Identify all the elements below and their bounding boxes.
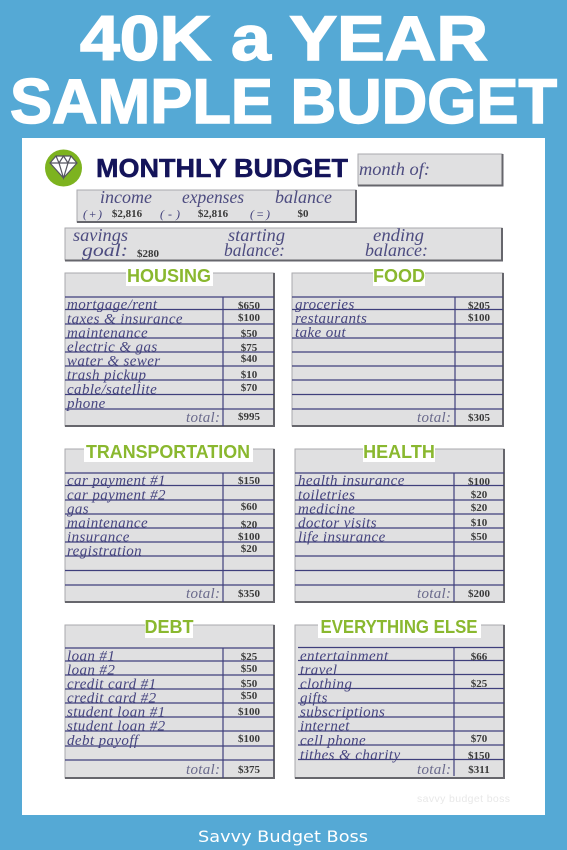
panel: health: medicine [298,502,355,518]
panel: debt: student loan #1 [67,704,166,720]
panel: health: total: [417,586,451,602]
panel: income expenses balance: balance [275,187,332,207]
heading: monthly budget: MONTHLY BUDGET [96,153,348,183]
heading: transportation: TRANSPORTATION [86,442,250,462]
title: 40K a YEAR [80,4,488,74]
panel: transportation: $100 [238,531,260,543]
panel: savings goal and balances [65,225,502,260]
panel: transportation: car payment #2 [67,488,166,504]
panel: debt: total: [186,762,220,778]
panel: food: total: [417,410,451,426]
panel: food: restaurants [295,311,367,327]
panel: food: groceries [295,297,355,313]
heading: housing: HOUSING [127,266,211,286]
panel: white budget sheet [22,138,545,815]
panel: income expenses balance [77,187,356,222]
panel: everything else: subscriptions [300,704,385,720]
panel: housing: mortgage/rent [67,297,158,313]
panel: debt: $25 [241,651,258,663]
heading: health: HEALTH [363,442,435,462]
panel: savings goal and balances: savings [73,225,128,245]
panel: debt [65,617,274,778]
panel: income expenses balance: $2,816 [112,208,143,220]
panel: health: toiletries [298,488,355,504]
panel: transportation: $350 [238,588,260,600]
panel: transportation [65,441,274,602]
panel: transportation: maintenance [67,516,148,532]
panel: housing: taxes & insurance [67,312,183,328]
panel: debt: student loan #2 [67,718,166,734]
panel: health: $200 [468,588,490,600]
heading: everything else: EVERYTHING ELSE [320,617,478,637]
title: SAMPLE BUDGET [10,67,557,137]
panel: food: $305 [468,412,490,424]
panel: transportation: car payment #1 [67,473,166,489]
panel: everything else: total: [417,762,451,778]
panel: transportation: total: [186,586,220,602]
panel: everything else: gifts [300,690,328,706]
panel: income expenses balance: expenses [182,187,244,207]
panel: health: $20 [471,489,488,501]
panel: everything else: entertainment [300,648,389,664]
field: month of [358,154,502,186]
panel: savings goal and balances: balance: [365,240,428,260]
panel: debt: debt payoff [67,733,140,749]
panel: debt: credit card #2 [67,690,157,706]
panel: housing: $10 [241,369,258,381]
panel: health: $10 [471,517,488,529]
panel: debt: credit card #1 [67,676,156,692]
panel: transportation: $20 [241,519,258,531]
panel: income expenses balance: (+) [83,207,102,221]
footer: brand name: Savvy Budget Boss [198,827,368,846]
panel: debt: loan #1 [67,648,115,664]
panel: transportation: gas [67,502,89,518]
panel: housing: $50 [241,328,258,340]
icon: diamond logo [45,150,82,186]
panel: income expenses balance: $0 [298,208,309,220]
panel: everything else: travel [300,662,337,678]
panel: transportation: $150 [238,475,260,487]
panel: health: $50 [471,531,488,543]
panel: everything else: $25 [471,678,488,690]
field: month of: month of: [359,159,430,179]
panel: health: $100 [468,476,490,488]
panel: debt: $50 [241,690,258,702]
panel: transportation: $60 [241,501,258,513]
panel: housing: water & sewer [67,354,161,370]
panel: everything else: tithes & charity [300,748,401,764]
panel: housing: maintenance [67,326,148,342]
watermark: savvy budget boss [417,793,510,805]
panel: health [295,441,504,602]
panel: food [292,265,503,426]
panel: savings goal and balances: balance: [224,240,285,260]
panel: debt: $100 [238,706,260,718]
panel: everything else: $150 [468,750,490,762]
panel: income expenses balance: income [100,187,152,207]
panel: everything else: $70 [471,733,488,745]
panel: everything else: $311 [468,764,490,776]
panel: housing: cable/satellite [67,382,157,398]
panel: savings goal and balances: ending [373,225,424,245]
panel: transportation: insurance [67,530,130,546]
panel: savings goal and balances: goal: [82,240,128,260]
panel: housing: trash pickup [67,368,146,384]
panel: housing: $650 [238,300,260,312]
panel: debt: $50 [241,663,258,675]
panel: income expenses balance: $2,816 [198,208,229,220]
panel: debt: $50 [241,678,258,690]
panel: everything else: internet [300,718,350,734]
panel: food: take out [295,325,347,341]
panel: housing: $995 [238,411,260,423]
panel: everything else: cell phone [300,733,366,749]
panel: transportation: registration [67,544,142,560]
panel: food: $205 [468,300,490,312]
panel: debt: $100 [238,733,260,745]
panel: debt: $375 [238,764,260,776]
panel: housing: $70 [241,382,258,394]
panel: savings goal and balances: starting [228,225,285,245]
panel: everything else: $66 [471,651,488,663]
panel: housing: phone [66,396,106,412]
heading: debt: DEBT [144,617,194,637]
panel: food: $100 [468,312,490,324]
panel: housing [65,265,274,426]
panel: housing: total: [186,410,220,426]
panel: everything else [295,617,504,778]
panel: housing: $75 [241,342,258,354]
panel: health: health insurance [298,473,405,489]
panel: housing: $40 [241,353,258,365]
panel: housing: electric & gas [67,340,158,356]
panel: housing: $100 [238,312,260,324]
panel: debt: loan #2 [67,662,115,678]
title [10,4,557,137]
panel: health: life insurance [298,530,386,546]
panel: health: doctor visits [298,516,377,532]
heading: food: FOOD [373,266,425,286]
panel: health: $20 [471,502,488,514]
panel: income expenses balance: (-) [160,207,180,221]
panel: savings goal and balances: $280 [137,248,160,260]
panel: transportation: $20 [241,543,258,555]
panel: income expenses balance: (=) [250,207,270,221]
panel: everything else: clothing [300,676,352,692]
